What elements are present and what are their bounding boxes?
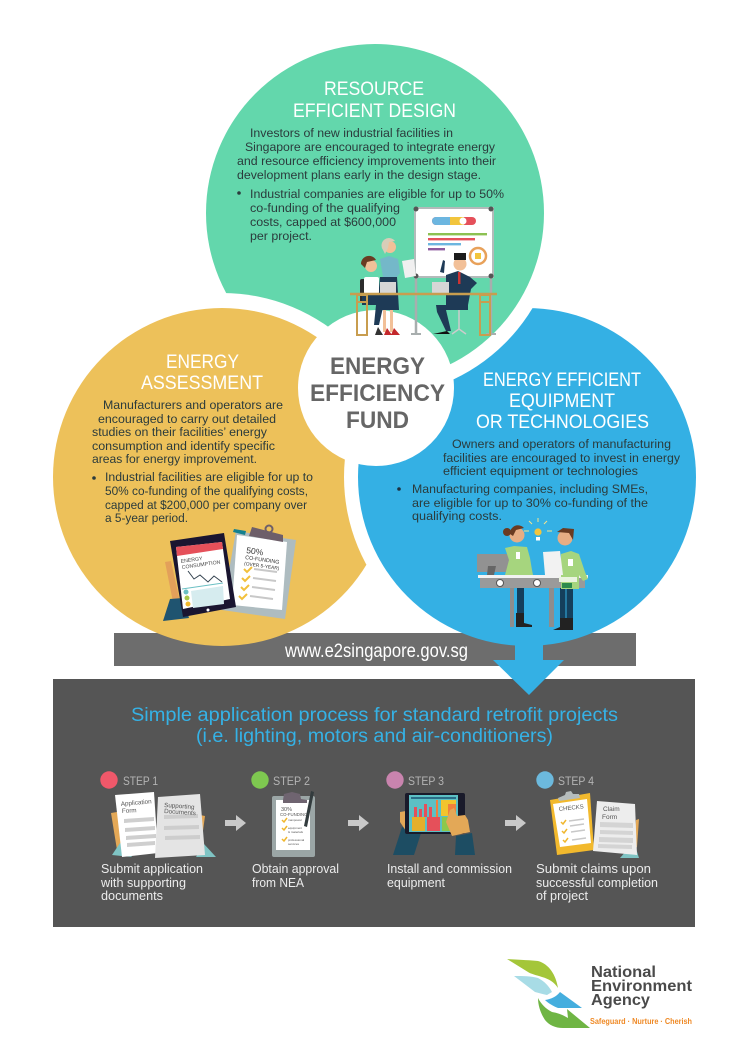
logo wordmark: Environment (591, 978, 692, 995)
icon: application forms: Application (121, 798, 152, 808)
illustration: office meeting (350, 206, 497, 335)
icon: checks clipboard and claim form (550, 791, 639, 858)
heading: ASSESSMENT (141, 373, 263, 394)
body text: are eligible for up to 30% co-funding of the (412, 496, 648, 510)
body text: capped at $200,000 per company over (105, 498, 307, 512)
arrow: website to application process (493, 640, 564, 695)
website banner (114, 633, 636, 666)
heading: RESOURCE (324, 79, 424, 100)
body text: costs, capped at $600,000 (250, 215, 396, 229)
body text: encouraged to carry out detailed (98, 412, 276, 426)
step 4: STEP 4 (558, 776, 595, 788)
body text: co-funding of the qualifying (250, 201, 400, 215)
step 2: STEP 2 (273, 776, 310, 788)
step 4 description: successful completion (536, 876, 658, 890)
step 3 description: Install and commission (387, 862, 512, 876)
heading: EFFICIENT DESIGN (293, 101, 456, 122)
panel: application process (53, 679, 695, 927)
step 3 description: equipment (387, 876, 445, 890)
body text (397, 437, 681, 523)
heading (293, 79, 456, 122)
center circle: fund title: EFFICIENCY (310, 380, 445, 407)
arrow (505, 815, 526, 831)
body text: Manufacturing companies, including SMEs, (412, 482, 648, 496)
logo wordmark: Safeguard · Nurture · Cherish (590, 1017, 692, 1026)
standing woman (377, 238, 416, 335)
infographic canvas (53, 44, 696, 1028)
desk (350, 294, 497, 335)
body text: 50% co-funding of the qualifying costs, (105, 484, 308, 498)
panel: resource efficient design (206, 44, 544, 382)
logo mark (507, 959, 590, 1028)
arrow (225, 815, 246, 831)
icon: checks clipboard and claim form: Claim (603, 806, 620, 813)
step 1 description: Submit application (101, 862, 203, 876)
icon: approval clipboard: & materials (288, 830, 304, 834)
body text: and resource efficiency improvements into their (237, 154, 496, 168)
illustration: tablet and clipboard: ENERGY (180, 556, 204, 565)
body text: per project. (250, 229, 312, 243)
seated woman (360, 256, 396, 335)
illustration: tablet and clipboard: 50% (246, 545, 264, 557)
step 3 description (387, 862, 512, 890)
panel: energy assessment (53, 308, 391, 646)
heading: ENERGY EFFICIENT (483, 370, 641, 391)
body text: areas for energy improvement. (92, 452, 257, 466)
panel: energy efficient equipment (358, 308, 696, 646)
logo wordmark: National (591, 964, 656, 981)
icon: approval clipboard: CO-FUNDING (280, 812, 308, 817)
logo: National Environment Agency (507, 959, 692, 1028)
process heading: Simple application process for standard retrofit projects (131, 705, 618, 726)
step 4 description (536, 862, 658, 903)
heading: EQUIPMENT (509, 391, 615, 412)
body text: Investors of new industrial facilities in (250, 126, 453, 140)
step 4 description: Submit claims upon (536, 862, 651, 876)
icon: approval clipboard: equipment (288, 826, 302, 830)
heading (476, 370, 649, 433)
center circle: fund title: FUND (346, 407, 409, 434)
body text: Owners and operators of manufacturing (452, 437, 671, 451)
logo wordmark (590, 964, 692, 1026)
step 2 description: Obtain approval (252, 862, 339, 876)
step 2 (251, 771, 339, 890)
heading: OR TECHNOLOGIES (476, 412, 649, 433)
logo wordmark: Agency (591, 992, 650, 1009)
step 4 (536, 771, 658, 903)
heading: ENERGY (166, 352, 239, 373)
body text: qualifying costs. (412, 509, 502, 523)
center circle: fund title (298, 310, 454, 466)
icon: approval clipboard: 30% (281, 807, 292, 813)
icon: tablet with hands (393, 793, 475, 855)
icon: approval clipboard (272, 791, 315, 857)
icon: checks clipboard and claim form: Form (602, 814, 617, 821)
heading (141, 352, 263, 394)
step 1 description (100, 862, 203, 903)
step 3 (386, 771, 512, 890)
illustration: tablet and clipboard: CONSUMPTION (181, 560, 221, 571)
step 2 description (252, 862, 339, 890)
body text: consumption and identify specific (92, 439, 275, 453)
step 4 description: of project (536, 889, 588, 903)
step 3: STEP 3 (408, 776, 444, 788)
illustration: tablet and clipboard (163, 526, 296, 621)
website banner: www.e2singapore.gov.sg (284, 641, 468, 662)
icon: checks clipboard and claim form: CHECKS (559, 804, 584, 813)
body text: efficient equipment or technologies (443, 464, 638, 478)
step 1 description: documents (101, 889, 163, 903)
icon: application forms: Form (122, 807, 137, 815)
process heading (131, 705, 618, 747)
icon: approval clipboard: manpower (288, 818, 302, 822)
step 1: STEP 1 (123, 776, 158, 788)
body text: a 5-year period. (105, 511, 188, 525)
illustration: engineers at workstation (477, 518, 588, 630)
body text: studies on their facilities’ energy (92, 425, 268, 439)
step 2 description: from NEA (252, 876, 305, 890)
center circle: fund title: ENERGY (330, 353, 425, 380)
body text (92, 398, 313, 525)
icon: application forms (111, 792, 216, 858)
body text: Industrial companies are eligible for up to 50% (250, 187, 504, 201)
arrow (348, 815, 369, 831)
icon: approval clipboard: services (288, 842, 300, 846)
process heading: (i.e. lighting, motors and air-conditioners) (196, 726, 553, 747)
icon: application forms: Supporting (164, 802, 195, 811)
man (432, 253, 477, 334)
icon: approval clipboard: professional (288, 838, 305, 842)
illustration: tablet and clipboard: CO-FUNDING (245, 555, 280, 566)
body text: Manufacturers and operators are (103, 398, 283, 412)
step 1 description: with supporting (100, 876, 186, 890)
illustration: tablet and clipboard: (OVER 5-YEAR) (244, 561, 280, 572)
body text: development plans early in the design stage. (237, 168, 481, 182)
step 1 (100, 771, 216, 903)
icon: application forms: Documents (164, 808, 196, 817)
body text (237, 126, 504, 243)
body text: Singapore are encouraged to integrate energy (245, 140, 496, 154)
body text: Industrial facilities are eligible for up to (105, 470, 313, 484)
body text: facilities are encouraged to invest in energy (443, 451, 681, 465)
